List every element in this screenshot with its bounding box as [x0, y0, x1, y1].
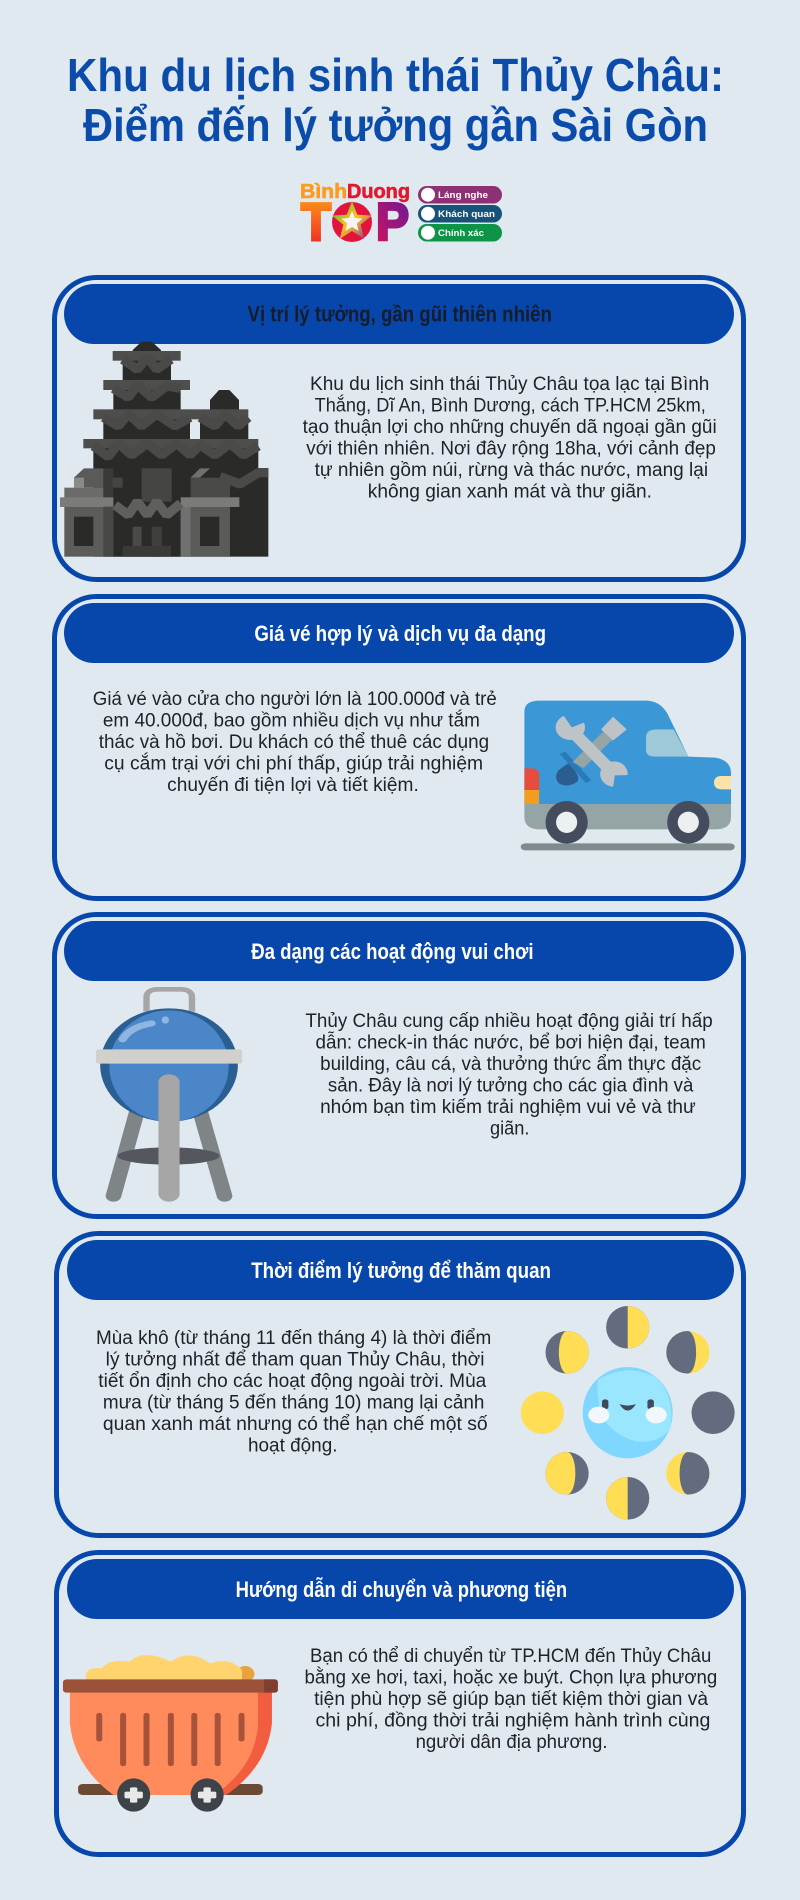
- heading: activities: Đa dạng các hoạt động vui chơi: [251, 939, 534, 964]
- text: ticket price: cụ cắm trại với chi phí thấp, giúp trải nghiệm: [104, 753, 483, 775]
- panel: best time: [56, 1234, 744, 1536]
- logo: Binh Duong TOP: Bình: [300, 181, 347, 203]
- text: activities: nhóm bạn tìm kiếm trải nghiệm vui vẻ và thư: [320, 1097, 696, 1118]
- text: activities: dẫn: check-in thác nước, bể bơi hiện đại, team: [316, 1032, 706, 1054]
- text: location: không gian xanh mát và thư giãn.: [368, 482, 652, 503]
- text: location: Khu du lịch sinh thái Thủy Châu tọa lạc tại Bình: [310, 374, 709, 395]
- icon: mine cart: [63, 1655, 278, 1812]
- logo: Binh Duong TOP: Duong: [347, 181, 410, 203]
- text: transport: tiện phù hợp sẽ giúp bạn tiết kiệm thời gian và: [314, 1689, 708, 1710]
- text: transport: chi phí, đồng thời trải nghiệm hành trình cùng: [316, 1711, 710, 1732]
- text: ticket price: thác và hồ bơi. Du khách có thể thuê các dụng: [99, 732, 489, 753]
- heading: best time: [67, 1240, 734, 1300]
- heading: best time: Thời điểm lý tưởng để thăm quan: [251, 1258, 551, 1283]
- text: activities: sản. Đây là nơi lý tưởng cho các gia đình và: [328, 1076, 694, 1097]
- text: transport: [304, 1646, 717, 1753]
- icon: repair van: [521, 701, 735, 850]
- logo: Binh Duong TOP: Khách quan: [438, 209, 495, 220]
- title: [67, 49, 724, 151]
- text: best time: [96, 1328, 491, 1457]
- logo: Binh Duong TOP: T: [301, 193, 331, 252]
- text: ticket price: Giá vé vào cửa cho người lớn là 100.000đ và trẻ: [93, 689, 497, 710]
- logo: Binh Duong TOP: [300, 181, 502, 252]
- heading: ticket price: Giá vé hợp lý và dịch vụ đa dạng: [254, 621, 546, 646]
- text: ticket price: em 40.000đ, bao gồm nhiều dịch vụ như tắm: [103, 710, 480, 732]
- heading: activities: [64, 921, 734, 981]
- text: transport: bằng xe hơi, taxi, hoặc xe buýt. Chọn lựa phương: [304, 1666, 717, 1688]
- text: best time: lý tưởng nhất để tham quan Thủy Châu, thời: [106, 1350, 484, 1370]
- title: Điểm đến lý tưởng gần Sài Gòn: [83, 99, 708, 151]
- text: ticket price: chuyến đi tiện lợi và tiết kiệm.: [167, 775, 419, 796]
- heading: location: Vị trí lý tưởng, gần gũi thiên nhiên: [248, 302, 552, 326]
- text: best time: Mùa khô (từ tháng 11 đến tháng 4) là thời điểm: [96, 1328, 491, 1349]
- text: transport: người dân địa phương.: [416, 1732, 608, 1753]
- text: location: tự nhiên gồm núi, rừng và thác nước, mang lại: [315, 460, 708, 481]
- text: location: Thắng, Dĩ An, Bình Dương, cách TP.HCM 25km,: [315, 394, 706, 416]
- panel: location: [54, 278, 744, 580]
- text: activities: [305, 1011, 713, 1140]
- panel: ticket price: [54, 596, 744, 898]
- icon: grill: [96, 989, 242, 1202]
- text: location: với thiên nhiên. Nơi đây rộng 18ha, với cảnh đẹp: [306, 439, 716, 460]
- logo: Binh Duong TOP: P: [376, 193, 409, 252]
- icon: moon phases: [521, 1306, 735, 1520]
- text: best time: tiết ổn định cho các hoạt động ngoài trời. Mùa: [98, 1371, 487, 1392]
- text: activities: building, câu cá, và thưởng thức ẩm thực đặc: [320, 1054, 701, 1075]
- heading: location: [64, 284, 734, 344]
- text: best time: hoạt động.: [248, 1436, 338, 1457]
- text: ticket price: [93, 689, 497, 796]
- title: Khu du lịch sinh thái Thủy Châu:: [67, 49, 724, 101]
- text: best time: mưa (từ tháng 5 đến tháng 10) mang lại cảnh: [103, 1393, 484, 1414]
- heading: transport: [67, 1559, 734, 1619]
- logo: Binh Duong TOP: Láng nghe: [438, 190, 488, 201]
- heading: ticket price: [64, 603, 734, 663]
- text: activities: Thủy Châu cung cấp nhiều hoạt động giải trí hấp: [305, 1011, 713, 1032]
- text: activities: giãn.: [490, 1119, 530, 1140]
- icon: temple: [60, 342, 268, 557]
- panel: transport: [56, 1552, 744, 1854]
- text: best time: quan xanh mát nhưng có thể hạn chế một số: [103, 1414, 488, 1435]
- heading: transport: Hướng dẫn di chuyển và phương tiện: [236, 1577, 567, 1602]
- logo: Binh Duong TOP: Chính xác: [438, 228, 484, 239]
- panel: activities: [54, 914, 744, 1216]
- text: transport: Bạn có thể di chuyển từ TP.HCM đến Thủy Châu: [310, 1646, 711, 1667]
- text: location: [303, 374, 717, 503]
- text: location: tạo thuận lợi cho những chuyến dã ngoại gần gũi: [303, 417, 717, 438]
